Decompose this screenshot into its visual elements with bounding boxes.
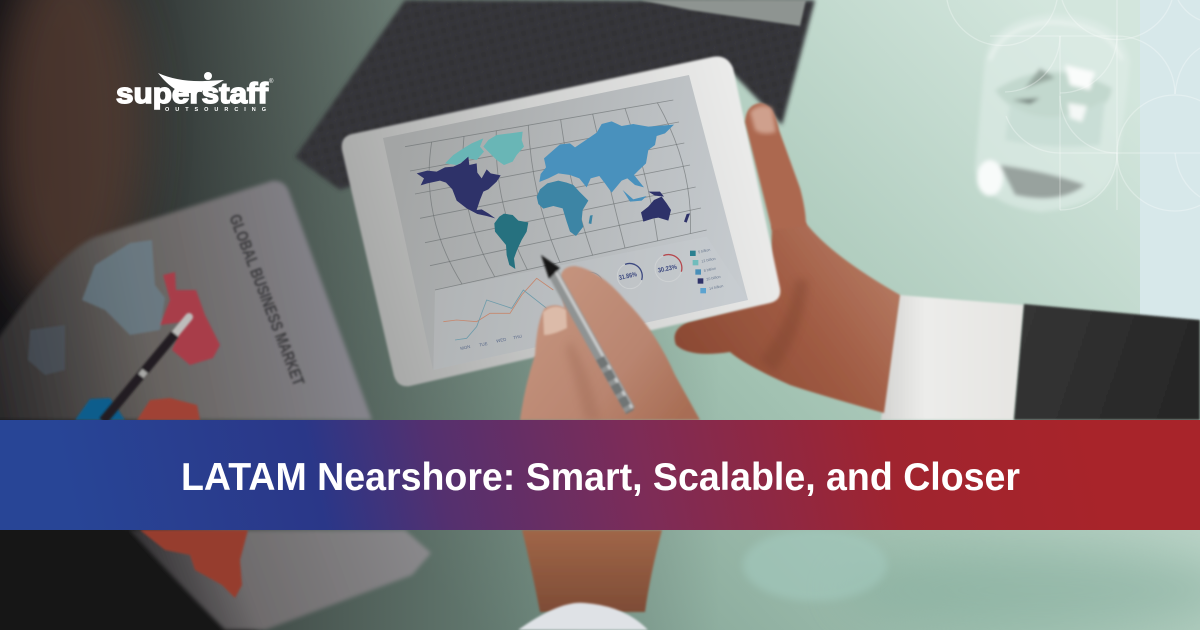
paper heading text: GLOBAL BUSINESS MARKET: [225, 212, 308, 389]
line chart: [443, 278, 553, 340]
chart axis labels: [460, 334, 522, 351]
title band: [0, 420, 1200, 530]
legend: 20 billion: [706, 275, 721, 282]
chart axis labels: THU: [512, 334, 522, 340]
logo swoosh: [158, 73, 224, 93]
continents: [417, 121, 690, 269]
SuperStaff logo: [116, 72, 274, 113]
map: blue lower continent: [75, 398, 125, 420]
shirt cuff below band: [518, 603, 648, 630]
paper document with world map: [0, 181, 431, 630]
chart axis labels: MON: [460, 344, 471, 351]
tablet screen: [383, 75, 748, 370]
left hand holding pen: [520, 266, 700, 420]
right hand holding tablet: [674, 222, 900, 413]
map: faded continent: [28, 325, 65, 375]
logo dot: [204, 72, 212, 80]
Madagascar: [589, 215, 593, 224]
Arctic Canada: [445, 138, 484, 165]
legend: 5 billion: [698, 248, 711, 254]
pen on paper: [103, 317, 189, 421]
drinking glass: [975, 14, 1130, 212]
Africa: [537, 181, 588, 236]
logo wordmark: superstaff: [116, 78, 268, 110]
New Zealand: [684, 213, 690, 223]
partial gauge: [587, 272, 603, 282]
Australia: [641, 197, 671, 222]
gauge: 31.86%: 31.86%: [618, 271, 638, 282]
map: red lower continent: [137, 398, 200, 420]
logo tagline: OUTSOURCING: [165, 107, 266, 113]
South America: [494, 214, 528, 269]
laptop keyboard: [295, 0, 815, 190]
wrist below band: [522, 530, 662, 612]
paper map shapes: [28, 240, 248, 598]
New Guinea: [648, 192, 664, 197]
decorative line pattern: [947, 0, 1200, 211]
legend: [690, 248, 724, 293]
Indonesia: [623, 190, 647, 202]
registered mark: ®: [269, 78, 274, 85]
shirt cuff: [881, 295, 1024, 420]
Eurasia: [539, 121, 674, 193]
map grid: [405, 100, 707, 290]
pen in hand: [541, 255, 632, 412]
gauge: 30.23%: 30.23%: [657, 264, 678, 275]
Greenland: [483, 132, 524, 165]
North America: [417, 157, 501, 218]
legend: 14 billion: [709, 284, 724, 291]
title: LATAM Nearshore: Smart, Scalable, and Closer: [181, 456, 1020, 499]
chart axis labels: TUE: [479, 341, 488, 348]
lower chart panel: [433, 237, 748, 370]
thumbnail: [750, 106, 776, 134]
map: red upper continent: [160, 272, 220, 365]
chart axis labels: WED: [496, 337, 507, 344]
map: blue continent: [82, 240, 165, 335]
thumb of right hand: [745, 103, 806, 230]
world map chart: [405, 100, 748, 370]
tablet device: [342, 56, 780, 386]
legend: 12 billion: [701, 257, 716, 264]
gauge: 31.86%: [617, 263, 643, 289]
legend: 8 billion: [703, 266, 716, 273]
map: red continent below band: [140, 530, 248, 598]
suit sleeve: [1014, 304, 1200, 420]
gauge: 30.23%: [655, 255, 682, 282]
